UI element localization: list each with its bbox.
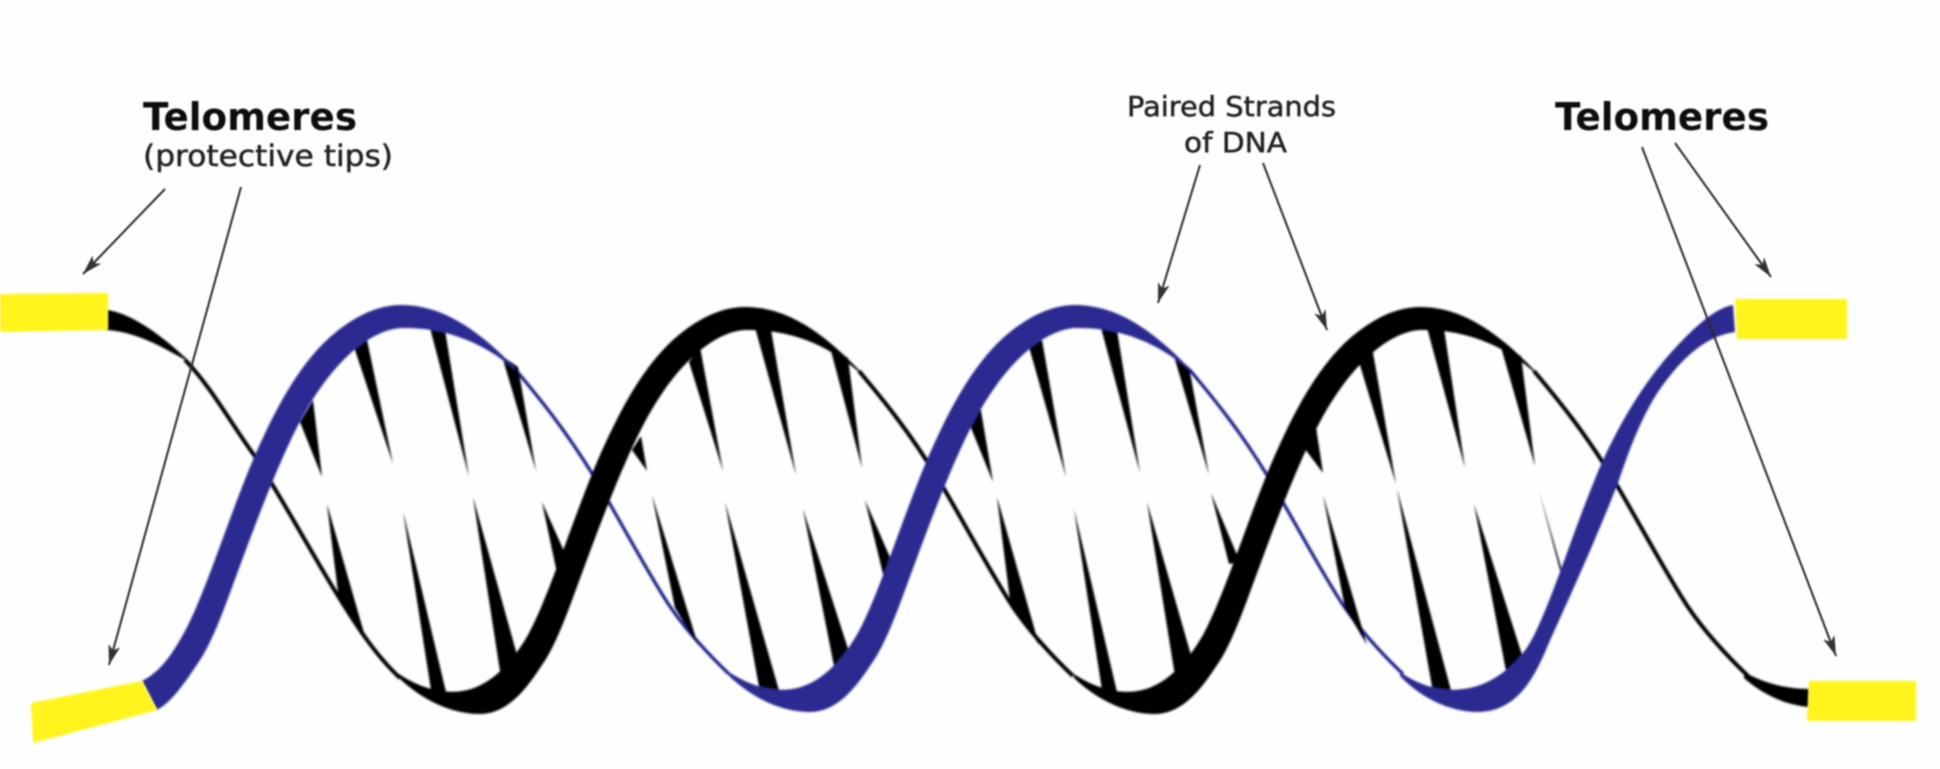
label: of DNA: of DNA <box>1184 126 1287 159</box>
arrow: paired strands to black strand <box>1263 163 1327 330</box>
arrow: telomeres to bottom right cap <box>1642 147 1836 656</box>
text labels <box>143 90 1769 173</box>
telomere cap: top right <box>1735 299 1847 339</box>
heading: left telomeres: Telomeres <box>143 95 357 139</box>
label: paired strands: Paired Strands <box>1127 90 1336 123</box>
heading: right telomeres: Telomeres <box>1555 95 1769 139</box>
telomere cap: top left <box>0 293 108 332</box>
thick blue strand segments <box>142 305 1735 712</box>
arrow: paired strands to blue strand <box>1158 165 1200 303</box>
arrow: telomeres to bottom left cap <box>109 187 241 665</box>
base pair rungs <box>300 322 1564 694</box>
subheading: protective tips: (protective tips) <box>143 139 393 173</box>
label arrows <box>83 143 1836 665</box>
telomere cap: bottom right <box>1807 681 1916 721</box>
thin descending blue strand segments <box>515 369 1403 674</box>
telomere caps (yellow tips) <box>0 293 1916 743</box>
telomere cap: bottom left <box>31 681 157 743</box>
arrow: telomeres to top right cap <box>1675 143 1771 277</box>
thick black strand segments <box>107 307 1809 714</box>
DNA double helix <box>107 305 1809 714</box>
arrow: telomeres to top left cap <box>83 189 165 274</box>
thin descending black strand segments <box>185 360 1748 678</box>
